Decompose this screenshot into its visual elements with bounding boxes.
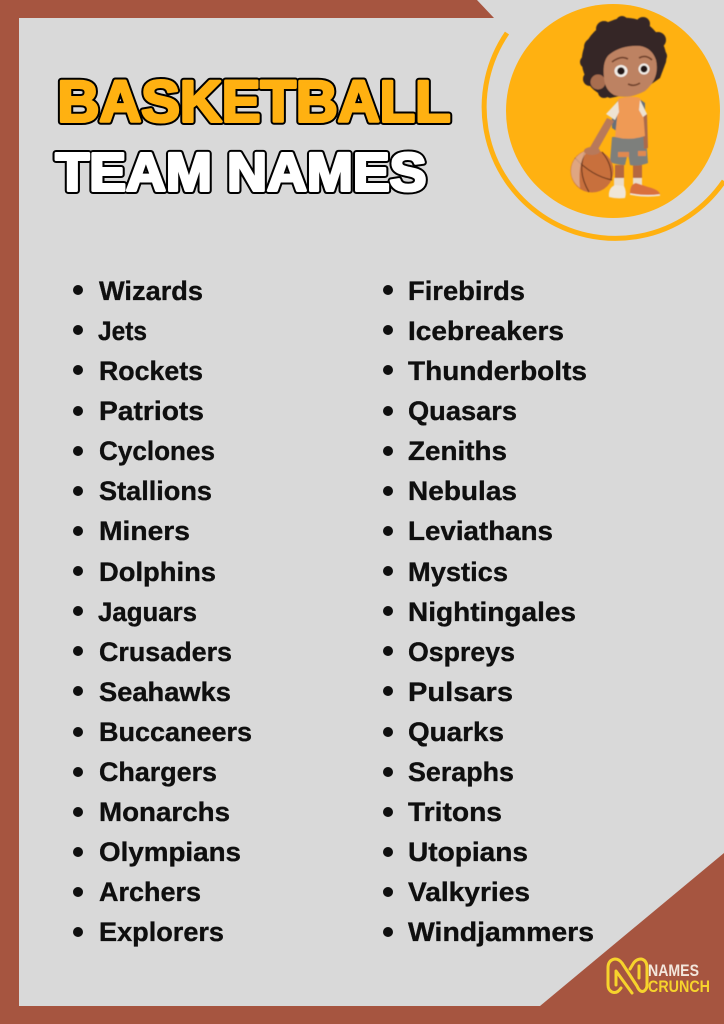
title line: team names: TEAM NAMES <box>56 144 426 202</box>
names list: right column: Mystics <box>408 557 508 587</box>
names list: right column: Thunderbolts <box>408 356 587 386</box>
names list: right column: Seraphs <box>408 757 514 787</box>
names list: right column: Zeniths <box>408 436 507 466</box>
title <box>56 70 450 202</box>
names list: right column: Valkyries <box>408 877 530 907</box>
hand on ball <box>584 147 600 155</box>
names list: right column: Tritons <box>408 797 502 827</box>
names list: left column: Explorers <box>99 917 224 947</box>
names list: left column: Archers <box>99 877 201 907</box>
names list: right column: Quasars <box>408 396 517 426</box>
logo mark <box>608 959 647 993</box>
names list: left column: Dolphins <box>99 557 216 587</box>
ear <box>590 74 606 90</box>
title line: team names: TEAM NAMES <box>56 144 426 202</box>
icon: boy with basketball <box>570 16 667 198</box>
names list: left column: Miners <box>99 516 190 546</box>
names list: right column: Quarks <box>408 717 504 747</box>
backpack straps <box>612 98 645 132</box>
face <box>604 46 657 97</box>
names list: right column: Nebulas <box>408 476 517 506</box>
logo: names crunch <box>608 959 710 996</box>
names list: left column: Patriots <box>99 396 204 426</box>
names list: left column: Wizards <box>99 276 203 306</box>
yellow circle badge <box>506 4 720 218</box>
sleeves <box>606 100 647 120</box>
title line: basketball: BASKETBALL <box>58 70 450 134</box>
logo: names crunch: CRUNCH <box>648 977 710 996</box>
names list: right column: Utopians <box>408 837 528 867</box>
socks <box>614 178 642 187</box>
names list: right column: Ospreys <box>408 637 515 667</box>
names list: left column: Crusaders <box>99 637 232 667</box>
names list: left column: Rockets <box>99 356 203 386</box>
names list: left column: Jets <box>98 316 147 346</box>
names list: right column <box>383 276 594 947</box>
names list: left column: Olympians <box>99 837 241 867</box>
names list: right column: Firebirds <box>408 276 525 306</box>
names list: left column: Buccaneers <box>99 717 252 747</box>
shorts <box>610 136 648 166</box>
names list: left column: Seahawks <box>99 677 231 707</box>
names list: left column: Jaguars <box>98 597 197 627</box>
legs <box>615 165 642 183</box>
shorts patches <box>618 151 646 157</box>
names list: left column: Cyclones <box>99 436 215 466</box>
names list: right column: Pulsars <box>408 677 513 707</box>
left arm <box>589 118 614 153</box>
brown frame: bottom border and corner triangle <box>0 853 724 1024</box>
right arm <box>642 112 648 149</box>
yellow arc around badge <box>484 33 724 238</box>
names list: left column <box>73 276 252 947</box>
eyebrows and mouth <box>612 56 652 85</box>
names list: left column: Monarchs <box>99 797 230 827</box>
eyes <box>614 64 650 77</box>
names list: right column: Windjammers <box>408 917 594 947</box>
shoes <box>609 185 626 198</box>
basketball <box>570 150 614 192</box>
hair <box>580 16 667 98</box>
names list: right column: Leviathans <box>408 516 553 546</box>
t-shirt <box>615 97 645 139</box>
brown frame: top and left border <box>0 0 494 1024</box>
title line: basketball: BASKETBALL <box>58 70 450 134</box>
names list: right column: Icebreakers <box>408 316 564 346</box>
names list: left column: Stallions <box>99 476 212 506</box>
names list: left column: Chargers <box>99 757 217 787</box>
names list: right column: Nightingales <box>408 597 576 627</box>
logo wordmark: NAMES <box>648 961 699 980</box>
